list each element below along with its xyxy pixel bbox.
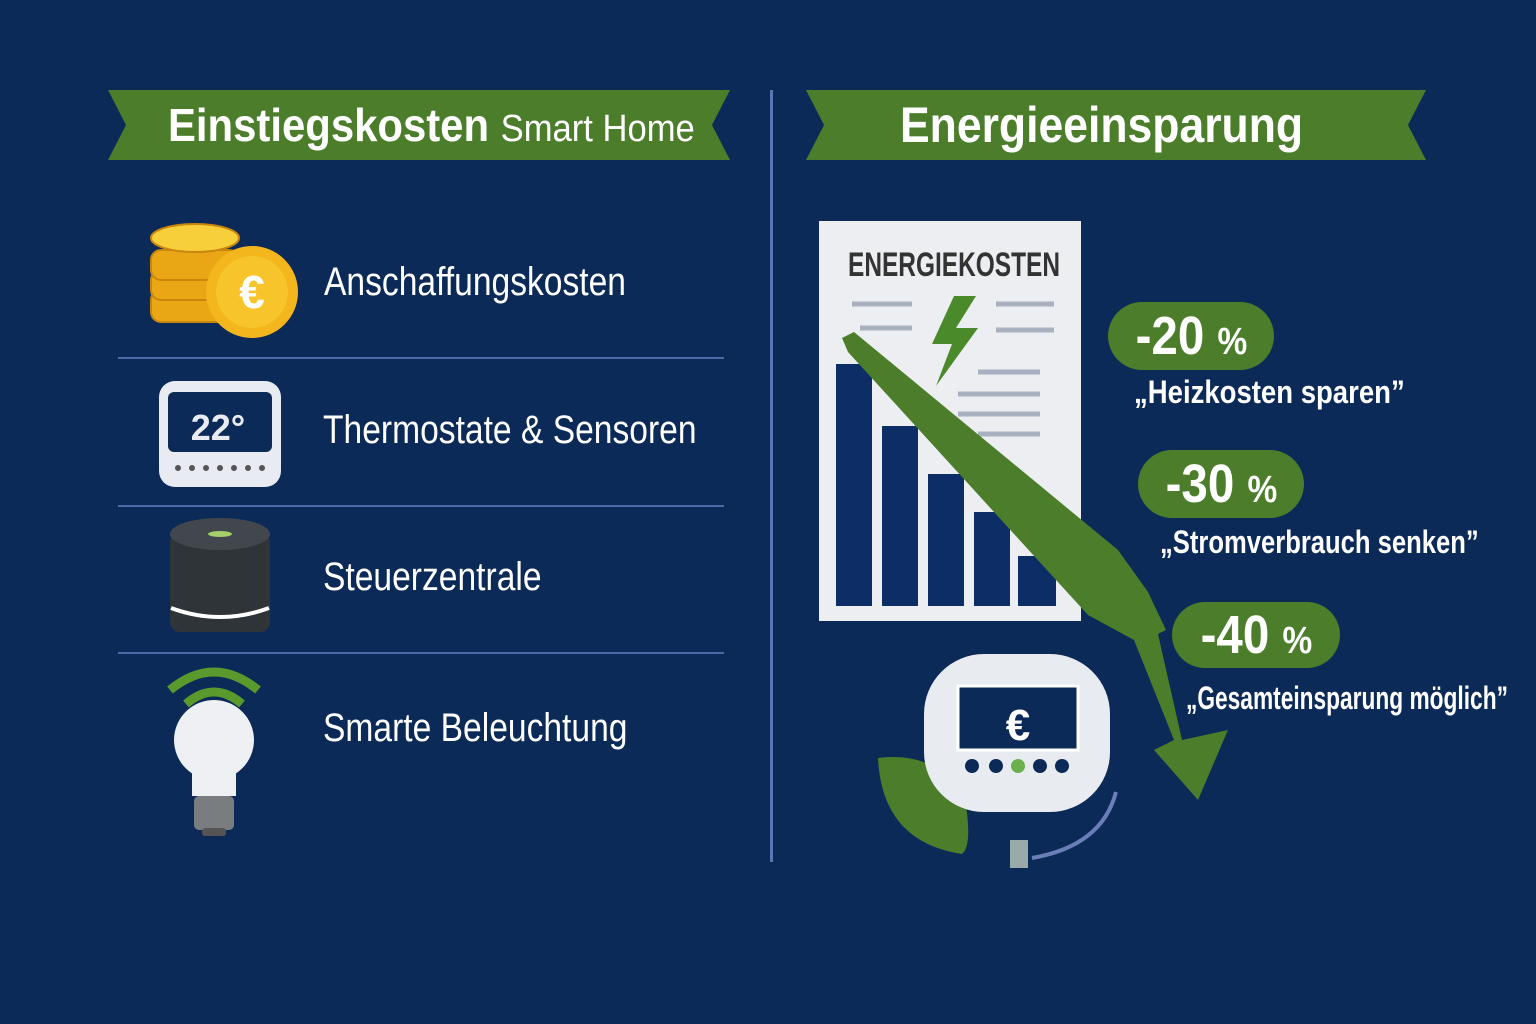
icon: thermostat: 22° bbox=[191, 407, 245, 448]
icon: bulb bbox=[167, 668, 261, 836]
icon: coins: € bbox=[239, 266, 265, 318]
banner: Energieeinsparung: Energieeinsparung bbox=[900, 97, 1303, 153]
callout: -20%: -20 % bbox=[1135, 306, 1247, 366]
chart: energy bill with bars and arrow: ENERGIEKOSTEN bbox=[848, 246, 1060, 284]
text: Steuerzentrale: Steuerzentrale bbox=[323, 555, 542, 599]
banner: Einstiegskosten bbox=[108, 90, 730, 160]
banner: Einstiegskosten: Einstiegskosten Smart Home bbox=[168, 99, 695, 151]
callout: -20%: „Heizkosten sparen” bbox=[1134, 374, 1405, 410]
icon: smart meter with leaf bbox=[878, 654, 1118, 868]
text: Smarte Beleuchtung: Smarte Beleuchtung bbox=[323, 706, 627, 750]
callout: -40%: -40 % bbox=[1200, 605, 1312, 665]
callout: -30%: -30 % bbox=[1165, 454, 1277, 514]
text: Anschaffungskosten: Anschaffungskosten bbox=[324, 260, 626, 304]
callout: -30%: „Stromverbrauch senken” bbox=[1160, 524, 1479, 560]
divider bbox=[770, 90, 773, 862]
icon: thermostat bbox=[159, 381, 281, 487]
banner: Energieeinsparung bbox=[806, 90, 1426, 160]
callout: -40% bbox=[1172, 602, 1508, 716]
callout: -30% bbox=[1138, 450, 1479, 560]
icon: smart meter with leaf: € bbox=[1006, 701, 1030, 750]
chart: energy bill with bars and arrow bbox=[819, 221, 1228, 800]
text: Thermostate: Thermostate & Sensoren bbox=[323, 408, 697, 452]
callout: -20% bbox=[1108, 302, 1405, 410]
icon: hub bbox=[170, 518, 270, 632]
icon: coins bbox=[150, 223, 298, 338]
callout: -40%: „Gesamteinsparung möglich” bbox=[1186, 680, 1508, 716]
